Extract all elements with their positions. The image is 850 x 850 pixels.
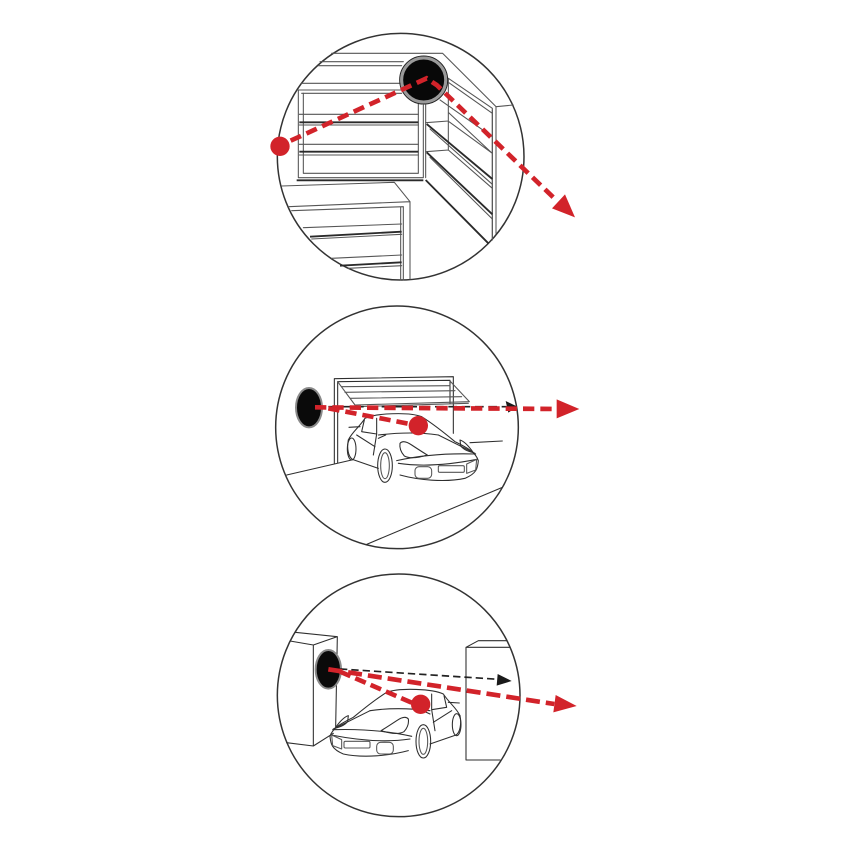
car bbox=[330, 689, 461, 758]
red beam and arrow bbox=[328, 669, 577, 712]
target dot on car bbox=[411, 695, 430, 714]
shelving line drawing bbox=[282, 53, 513, 280]
icon: wall sensor bbox=[296, 388, 322, 427]
panel: gate sensor bbox=[277, 574, 577, 817]
icon: ceiling sensor bbox=[400, 56, 448, 104]
beam and arrow bbox=[291, 78, 575, 217]
gate pillars bbox=[287, 632, 510, 760]
panel outline circle bbox=[277, 574, 520, 817]
garage door and driveway bbox=[287, 377, 502, 544]
panel: garage door sensor bbox=[276, 306, 579, 549]
target dot bbox=[270, 137, 290, 156]
red beam and arrow bbox=[315, 399, 579, 418]
panel outline circle bbox=[276, 306, 518, 549]
red beam to car bbox=[340, 672, 412, 703]
panel outline circle bbox=[277, 33, 524, 280]
black reference beam bbox=[328, 401, 517, 413]
target dot on car bbox=[409, 416, 428, 435]
black reference beam bbox=[340, 669, 512, 686]
icon: pillar sensor bbox=[316, 650, 341, 689]
red beam to car bbox=[328, 408, 410, 424]
panel: shelving sensor bbox=[270, 33, 575, 280]
car bbox=[347, 414, 478, 482]
